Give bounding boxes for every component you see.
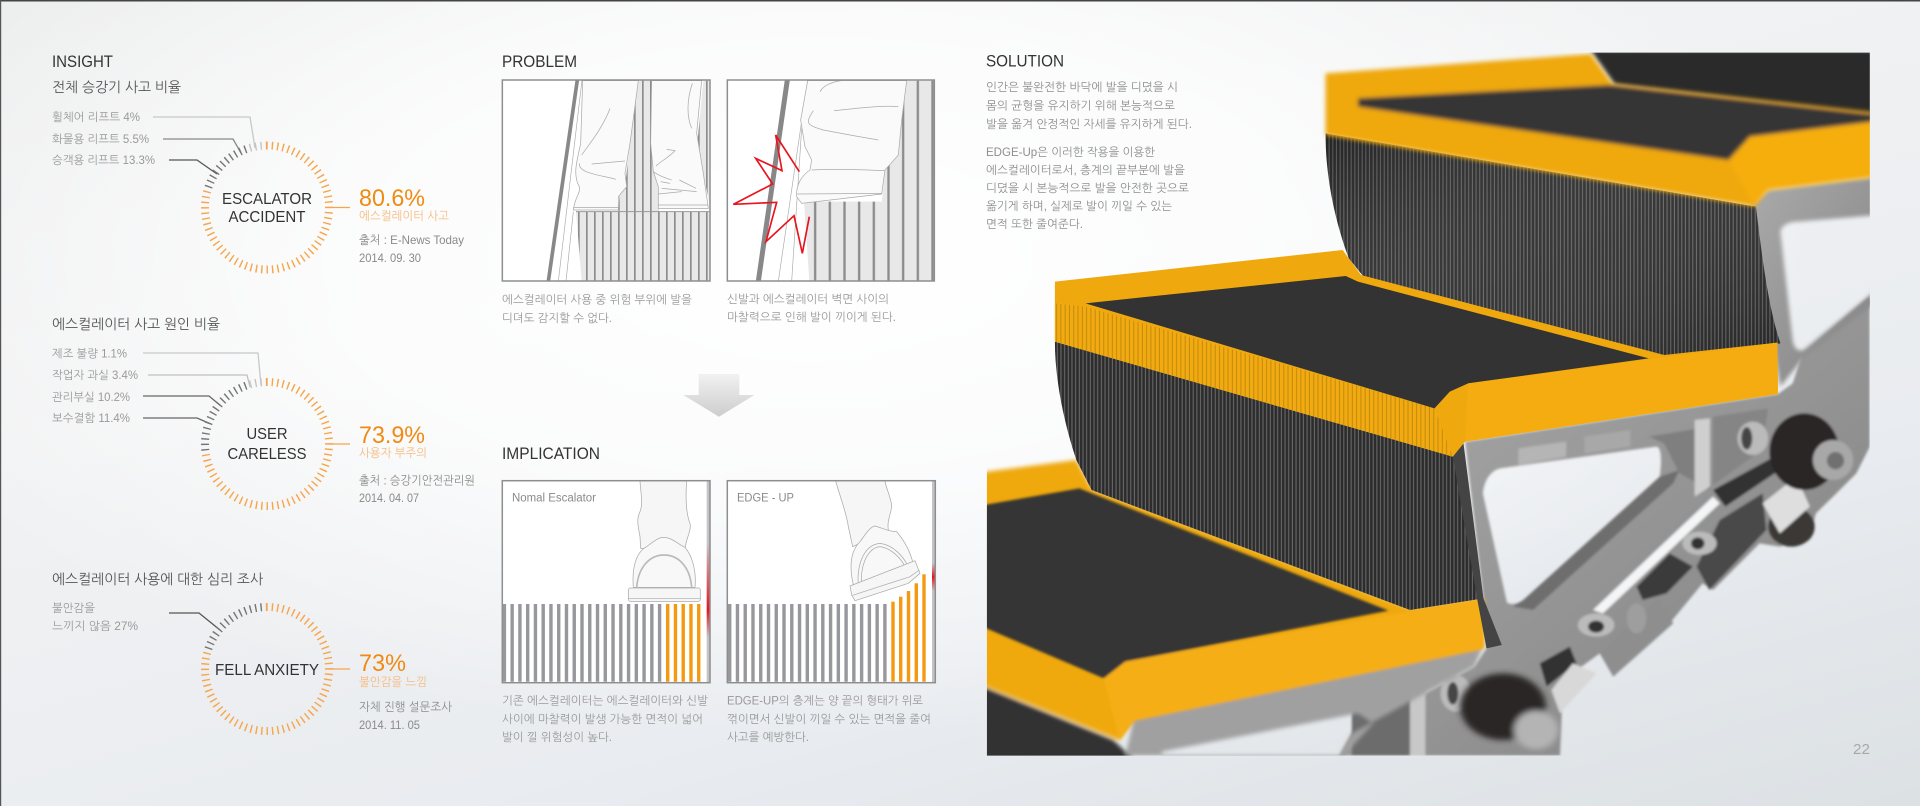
- subheading: overall lift accident ratio: 전체 승강기 사고 비율: [52, 79, 181, 95]
- stat: 73%: [359, 650, 452, 732]
- text block: human instinct: 몸의 균형을 유지하기 위해 본능적으로: [986, 100, 1175, 112]
- caption: problem right: [727, 293, 896, 324]
- page number: 22: [1853, 741, 1870, 758]
- text block: human instinct: [986, 81, 1192, 131]
- diagram: edge-up escalator: EDGE - UP: [737, 493, 794, 505]
- caption: problem left: 디뎌도 감지할 수 없다.: [502, 312, 612, 325]
- stat: 80.6%: 출처 : E-News Today: [359, 233, 464, 247]
- text block: edge-up description: [986, 146, 1189, 231]
- stat: 80.6%: 에스컬레이터 사고: [359, 209, 449, 223]
- caption: implication left: 기존 에스컬레이터는 에스컬레이터와 신발: [502, 694, 708, 708]
- illustration: edge-up escalator steps: [978, 50, 1878, 760]
- dial chart: escalator accident 80.6%: ACCIDENT: [228, 209, 306, 226]
- legend: accident causes: [52, 348, 261, 425]
- stat: 73.9%: [359, 422, 475, 505]
- section: implication: [502, 445, 935, 744]
- subheading: psychological survey: 에스컬레이터 사용에 대한 심리 조사: [52, 571, 264, 587]
- legend: lift accident categories: 화물용 리프트 5.5%: [52, 133, 149, 146]
- stat: 73.9%: 73.9%: [359, 422, 425, 449]
- step: lower step tread and panel: [978, 488, 1483, 740]
- stat: 73%: 73%: [359, 650, 406, 677]
- text block: edge-up description: 면적 또한 줄여준다.: [986, 218, 1083, 231]
- arrow: problem to implication: [683, 374, 754, 417]
- section: insight: [52, 53, 475, 732]
- stat: 80.6%: [359, 185, 464, 265]
- step: lower step (blurred): [978, 460, 1483, 760]
- text block: edge-up description: 옮기게 하며, 실제로 발이 끼일 수 있는: [986, 200, 1172, 213]
- caption: problem left: 에스컬레이터 사용 중 위험 부위에 발을: [502, 294, 692, 306]
- icon: foot on step: [628, 481, 700, 601]
- stat: 80.6%: 80.6%: [359, 185, 425, 212]
- step: middle step: [1055, 250, 1778, 648]
- legend: lift accident categories: 승객용 리프트 13.3%: [52, 154, 155, 167]
- section: solution: [986, 53, 1192, 231]
- subheading: escalator accident cause ratio: 에스컬레이터 사고 원인 비율: [52, 316, 220, 332]
- legend: no anxiety 27%: 불안감을: [52, 602, 95, 615]
- text block: edge-up description: EDGE-Up은 이러한 작용을 이용한: [986, 146, 1155, 159]
- dial chart: user careless 73.9%: [205, 382, 350, 506]
- caption: implication left: 사이에 마찰력이 발생 가능한 면적이 넓어: [502, 713, 703, 726]
- caption: implication right: [727, 694, 931, 744]
- text block: human instinct: 발을 옮겨 안정적인 자세를 유지하게 된다.: [986, 118, 1192, 131]
- caption: implication right: 사고를 예방한다.: [727, 731, 809, 744]
- legend: lift accident categories: [52, 111, 255, 174]
- stat: 73.9%: 사용자 부주의: [359, 446, 427, 460]
- dial chart: fell anxiety 73%: [205, 607, 350, 731]
- dial chart: escalator accident 80.6%: [205, 146, 350, 270]
- diagram: edge-up escalator: [727, 481, 935, 683]
- chain lower wheel: [1460, 673, 1558, 749]
- caption: problem left: [502, 294, 692, 325]
- caption: problem right: 마찰력으로 인해 발이 끼이게 된다.: [727, 311, 896, 324]
- heading: SOLUTION: SOLUTION: [986, 53, 1064, 71]
- step: top step riser: [1326, 133, 1780, 357]
- diagram: normal escalator: Nomal Escalator: [512, 493, 596, 505]
- dial chart: fell anxiety 73%: FELL ANXIETY: [215, 662, 319, 679]
- legend: lift accident categories: 휠체어 리프트 4%: [52, 111, 140, 124]
- illustration: foot trapped with red burst: [727, 80, 934, 281]
- heading: IMPLICATION: IMPLICATION: [502, 445, 600, 463]
- caption: implication left: 발이 낄 위험성이 높다.: [502, 731, 612, 744]
- icon: foot tilted on raised edge: [836, 481, 920, 601]
- section: problem: [502, 53, 934, 325]
- step: top step tread and yellow edge (blurred): [1326, 54, 1878, 207]
- text block: edge-up description: 디뎠을 시 본능적으로 발을 안전한 곳으로: [986, 182, 1189, 195]
- stat: 73.9%: 2014. 04. 07: [359, 491, 419, 505]
- stat: 73%: 자체 진행 설문조사: [359, 700, 452, 714]
- legend: no anxiety 27%: [52, 602, 220, 633]
- icon: red friction burst: [733, 135, 809, 253]
- metal frame and chain: [1340, 297, 1870, 756]
- text block: human instinct: 인간은 불완전한 바닥에 발을 디뎠을 시: [986, 81, 1178, 94]
- caption: implication left: [502, 694, 708, 744]
- legend: no anxiety 27%: 느끼지 않음 27%: [52, 620, 138, 633]
- legend: accident causes: 관리부실 10.2%: [52, 391, 130, 404]
- heading: PROBLEM: PROBLEM: [502, 53, 577, 71]
- diagram: normal escalator: [502, 481, 710, 683]
- step: top step back and frame (blurred): [1591, 50, 1878, 387]
- dial chart: user careless 73.9%: CARELESS: [228, 446, 306, 463]
- text block: edge-up description: 에스컬레이터로서, 층계의 끝부분에 발을: [986, 164, 1185, 177]
- caption: implication right: EDGE-UP의 층계는 양 끝의 형태가 위로: [727, 694, 923, 708]
- legend: accident causes: 작업자 과실 3.4%: [52, 369, 138, 382]
- stat: 73%: 불안감을 느낌: [359, 675, 427, 689]
- heading: INSIGHT: INSIGHT: [52, 53, 113, 71]
- caption: problem right: 신발과 에스컬레이터 벽면 사이의: [727, 293, 889, 306]
- caption: implication right: 꺾이면서 신발이 끼일 수 있는 면적을 줄여: [727, 713, 931, 726]
- stat: 80.6%: 2014. 09. 30: [359, 251, 421, 265]
- illustration: foot near escalator wall: [502, 80, 710, 281]
- dial chart: escalator accident 80.6%: ESCALATOR: [222, 191, 312, 208]
- dial chart: user careless 73.9%: USER: [246, 426, 288, 443]
- stat: 73%: 2014. 11. 05: [359, 718, 420, 732]
- legend: accident causes: 보수결함 11.4%: [52, 412, 130, 425]
- stat: 73.9%: 출처 : 승강기안전관리원: [359, 474, 475, 488]
- legend: accident causes: 제조 불량 1.1%: [52, 348, 127, 360]
